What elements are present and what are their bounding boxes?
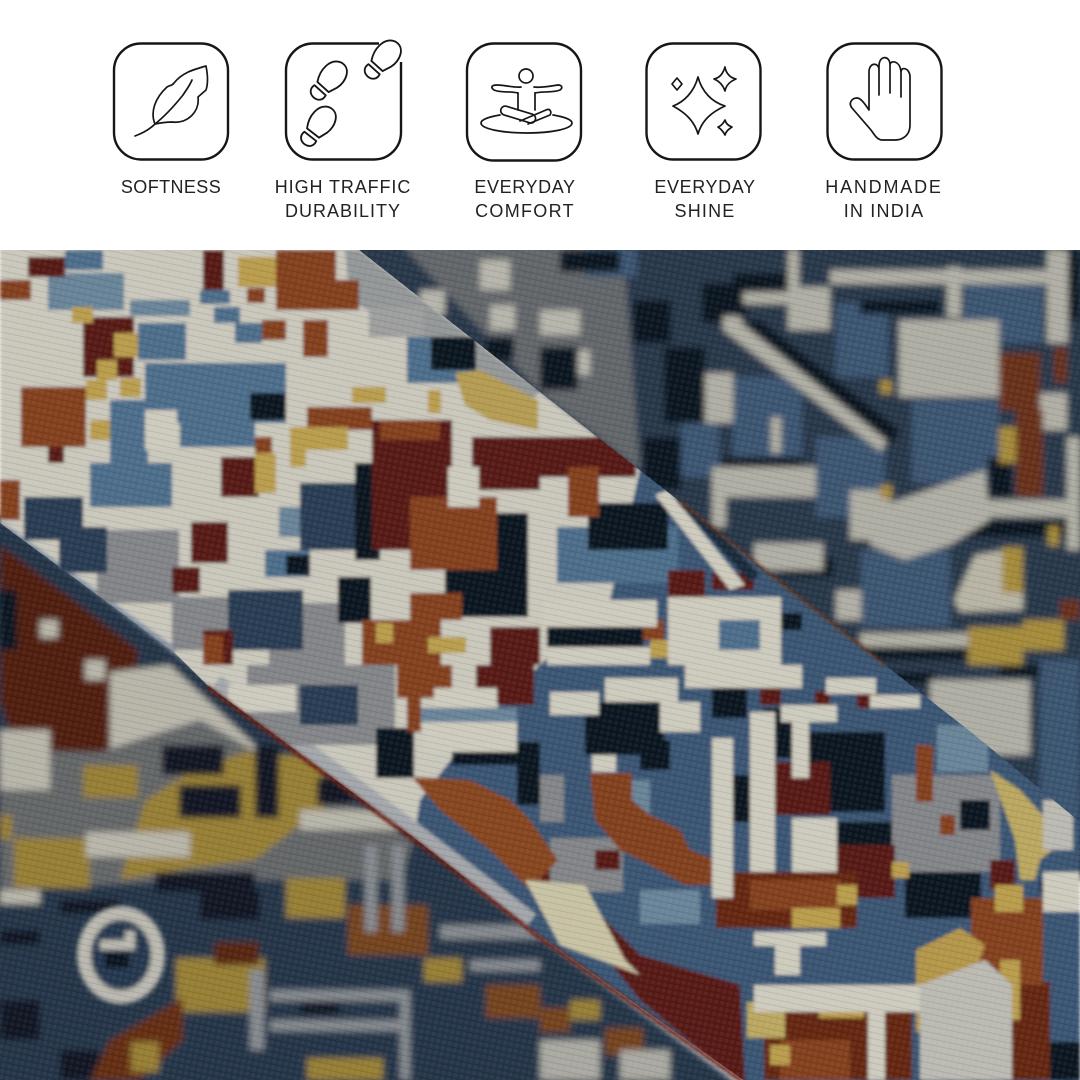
- label: high traffic durability: DURABILITY: [285, 201, 401, 221]
- red motifs: [28, 250, 1015, 898]
- label: everyday shine: [654, 177, 756, 221]
- label: high traffic durability: [275, 177, 411, 221]
- label: handmade in india: HANDMADE: [825, 177, 943, 197]
- icon: raised hand: [826, 42, 943, 161]
- gold motifs: [72, 257, 1023, 1065]
- rolled edge fringe: [207, 500, 885, 1080]
- navy patches: [24, 483, 376, 725]
- icon: footprints: [284, 40, 402, 161]
- spiral motif: [84, 913, 158, 997]
- cream and gray edge: [345, 250, 540, 400]
- feature row: [112, 40, 943, 221]
- photo: rolled rug close-up: [0, 250, 1080, 1080]
- icon: feather: [112, 42, 230, 161]
- orange motifs: [0, 250, 1043, 1080]
- rolled rug section: [0, 240, 1080, 1080]
- label: everyday comfort: COMFORT: [475, 201, 575, 221]
- gray patches: [97, 530, 1000, 892]
- background rug: lower left: [0, 500, 760, 1080]
- label: handmade in india: IN INDIA: [844, 201, 924, 221]
- label: everyday comfort: [474, 177, 576, 221]
- label: everyday shine: SHINE: [674, 201, 736, 221]
- label: high traffic durability: HIGH TRAFFIC: [275, 177, 411, 197]
- label: everyday comfort: EVERYDAY: [474, 177, 576, 197]
- label: softness: SOFTNESS: [121, 177, 221, 197]
- icon: meditating figure: [466, 42, 582, 162]
- cream field: [0, 240, 640, 838]
- background rug: upper right: [330, 200, 1080, 880]
- label: everyday shine: EVERYDAY: [654, 177, 756, 197]
- cream knot blocks: [145, 410, 1080, 1080]
- blue patches: [65, 250, 678, 583]
- icon: sparkles: [645, 42, 762, 161]
- label: handmade in india: [825, 177, 943, 221]
